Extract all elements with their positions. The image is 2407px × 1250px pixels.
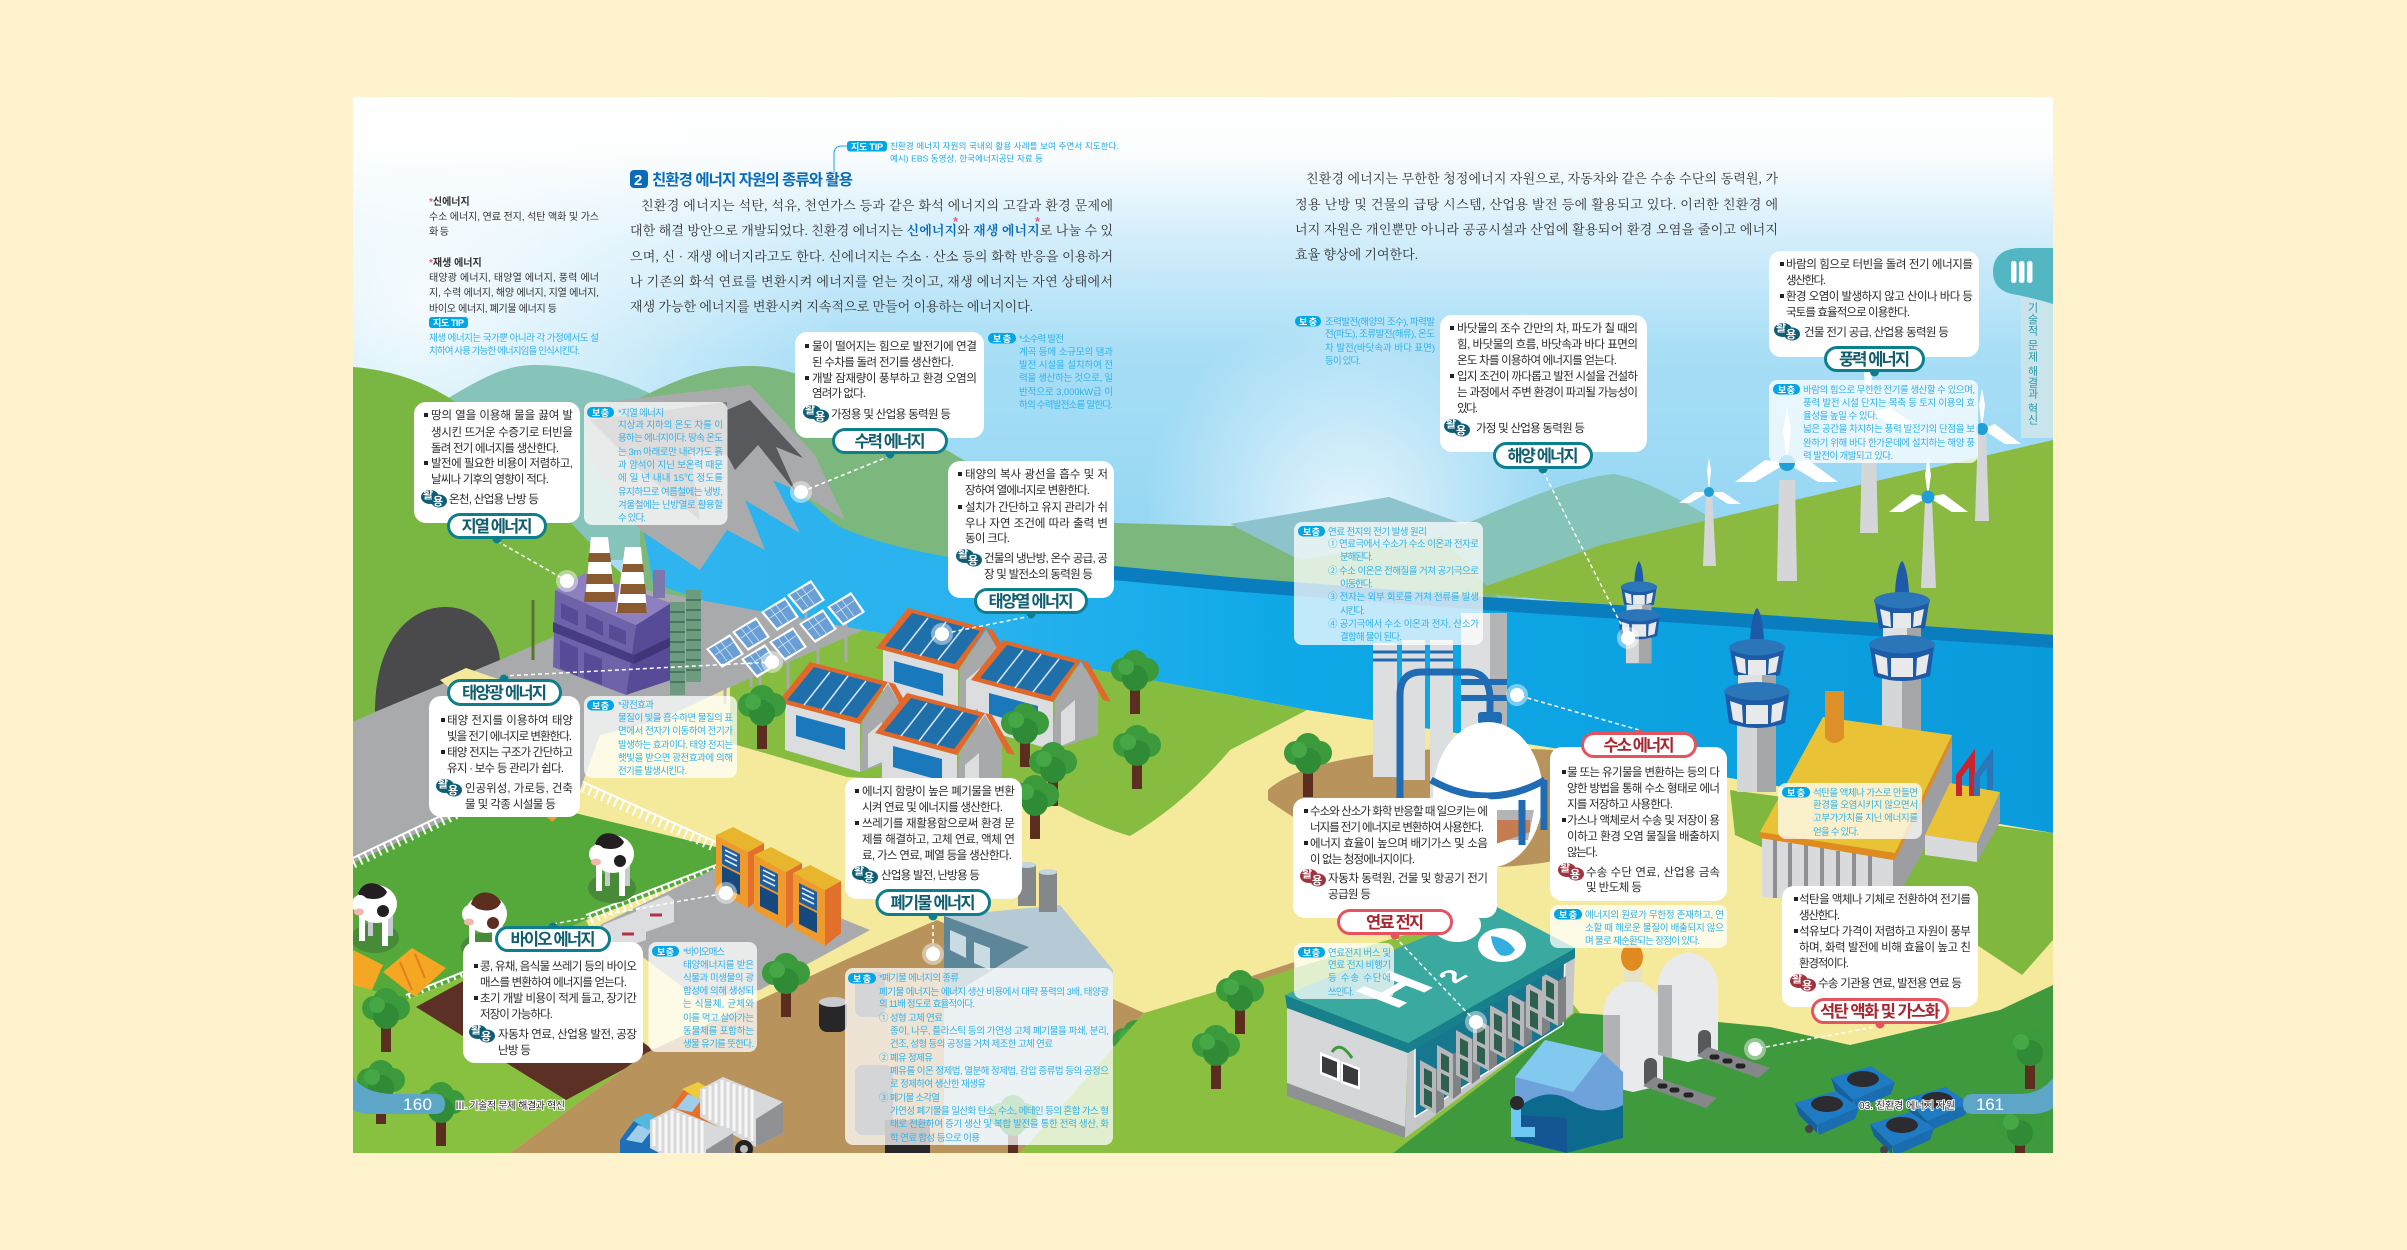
page number tab 160 <box>353 1077 445 1114</box>
sidebar glossary: 바이오 에너지, 폐기물 에너지 등 <box>429 303 557 315</box>
note: waste energy types: 태로 전환하여 증기 생산 및 복합 발전을 통한 전력 생산, 화 <box>890 1118 1109 1130</box>
note: photoelectric effect: 전기를 발생시킨다. <box>618 766 687 777</box>
panel: wind energy: 건물 전기 공급, 산업용 동력원 등 <box>1804 325 1949 339</box>
note: photoelectric effect <box>584 696 737 778</box>
panel: hydro energy: 물이 떨어지는 힘으로 발전기에 연결 <box>812 339 977 353</box>
grey pad and dirt yard <box>510 868 1144 1153</box>
right page light green wedge and dark green field <box>1020 748 2053 1153</box>
note: photoelectric effect: 햇빛을 받으면 광전효과에 의해 <box>618 752 733 764</box>
main paragraph right: 너지 자원은 개인뿐만 아니라 공공시설과 산업에 활용되어 환경 오염을 줄이고 에너지 <box>1295 222 1778 237</box>
label: hydro energy: 수력 에너지 <box>854 432 926 451</box>
label: fuel cell: 연료 전지 <box>1366 913 1424 932</box>
panel: hydrogen energy: 지를 저장하고 사용한다. <box>1567 797 1673 811</box>
footer right: 03. 친환경 에너지 자원 <box>1859 1099 1955 1112</box>
note: coal liquefaction: 석탄을 액체나 가스로 만들면 <box>1813 787 1918 799</box>
note: fuel cell vehicles: 등 수송 수단에 <box>1328 973 1391 984</box>
sidebar glossary: 화 등 <box>429 226 449 238</box>
panel: hydro energy: 된 수차를 돌려 전기를 생산한다. <box>812 356 954 369</box>
panel: hydrogen energy: 물 또는 유기물을 변환하는 등의 다 <box>1567 765 1720 779</box>
label: ocean energy: 해양 에너지 <box>1508 446 1578 466</box>
panel: hydrogen energy: 가스나 액체로서 수송 및 저장이 용 <box>1567 814 1720 827</box>
panel: hydrogen energy: 및 반도체 등 <box>1586 881 1642 894</box>
truck blue <box>620 1108 733 1153</box>
label: solar thermal energy: 태양열 에너지 <box>988 592 1074 611</box>
river <box>643 480 2053 833</box>
panel: ocean energy: 입지 조건이 까다롭고 발전 시설을 건설하 <box>1457 369 1638 383</box>
label: bio energy: 바이오 에너지 <box>510 930 596 949</box>
main paragraph left: 나 기존의 화석 연료를 변환시켜 에너지를 얻는 것이고, 재생 에너지는 자연 상태에서 <box>630 274 1113 289</box>
chapter tab: 기술적 문제 해결과 혁신 <box>2026 302 2038 425</box>
label: coal liquefaction and gasification <box>1812 1000 1948 1028</box>
panel: solar thermal energy: 장하여 열에너지로 변환한다. <box>965 483 1090 497</box>
label: hydro energy <box>834 430 946 458</box>
panel: photovoltaic energy: 활 <box>438 776 448 790</box>
fuel cell building: 2 <box>1431 966 1476 987</box>
illustrated landscape scene <box>351 97 2054 1189</box>
panel: waste energy: 쓰레기를 재활용함으로써 환경 문 <box>862 816 1015 830</box>
label: fuel cell <box>1338 910 1452 940</box>
panel: solar thermal energy: 장 및 발전소의 동력원 등 <box>984 567 1093 581</box>
hay bales <box>353 948 446 997</box>
panel: solar thermal energy: 동이 크다. <box>965 532 1010 545</box>
note: small hydro: *소수력 발전 <box>1019 333 1064 345</box>
sidebar glossary: 재생 에너지는 국가뿐 아니라 각 가정에서도 설 <box>429 332 599 344</box>
panel: bio energy <box>463 942 643 1063</box>
note: ocean energy types <box>1295 316 1435 367</box>
waste energy building <box>944 862 1113 1145</box>
panel: geothermal energy: 날씨나 기후의 영향이 적다. <box>431 473 549 486</box>
note: biomass: 태양에너지를 받은 <box>683 960 754 971</box>
label: hydrogen energy <box>1582 730 1696 756</box>
panel: ocean energy <box>1440 315 1647 452</box>
note: geothermal: 과 암석이 지닌 보온력 때문 <box>618 459 723 471</box>
note: waste energy types: *폐기물 에너지의 종류 <box>879 972 959 984</box>
fuel cell building <box>1285 907 1575 1138</box>
page number tab 161: 161 <box>1976 1095 2004 1114</box>
note: small hydro: 반적으로 3,000kW급 이 <box>1019 386 1113 398</box>
section heading: 2 <box>634 172 642 189</box>
panel: waste energy: 에너지 함량이 높은 폐기물을 변환 <box>862 785 1015 798</box>
note: waste energy types: 폐유를 이온 정제법, 열분해 정제법, 감압 증류법 등의 공정으 <box>890 1065 1109 1077</box>
note: fuel cell principle: 결합해 물이 된다. <box>1340 631 1402 643</box>
trees right page <box>1192 733 2054 1169</box>
sidebar glossary: 수소 에너지, 연료 전지, 석탄 액화 및 가스 <box>429 211 599 223</box>
note: waste energy types: ① 성형 고체 연료 <box>879 1013 943 1024</box>
panel: wind energy: 용 <box>1786 328 1796 341</box>
note: waste energy types: 의 11배 정도로 효율적이다. <box>879 998 975 1010</box>
label: photovoltaic energy: 태양광 에너지 <box>462 684 547 702</box>
fuel cell building: H <box>1339 964 1451 1015</box>
note: biomass: 동물체를 포함하는 <box>683 1025 754 1037</box>
panel: coal liquefaction and gasification: 환경적이다. <box>1799 956 1849 970</box>
panel: ocean energy: 온도 차를 이용하여 에너지를 얻는다. <box>1457 353 1617 367</box>
panel: photovoltaic energy: 태양 전지를 이용하여 태양 <box>447 713 573 727</box>
main paragraph right <box>1295 171 1778 262</box>
note: fuel cell vehicles: 보충 <box>1303 948 1320 958</box>
teaching tip top: 예시) EBS 동영상, 한국에너지공단 자료 등 <box>890 154 1043 164</box>
note: biomass: 는 식물체, 균체와 <box>683 998 754 1010</box>
panel: hydrogen energy: 이하고 환경 오염 물질을 배출하지 <box>1567 829 1720 843</box>
panel: fuel cell: 자동차 동력원, 건물 및 항공기 전기 <box>1328 871 1488 885</box>
note: photoelectric effect: 면에서 전자가 이동하여 전기가 <box>618 725 733 737</box>
label: coal liquefaction and gasification: 석탄 액화 및 가스화 <box>1820 1002 1940 1021</box>
note: geothermal <box>584 402 728 525</box>
panel: fuel cell: 용 <box>1312 874 1322 887</box>
label: ocean energy <box>1494 444 1592 474</box>
footer left: Ⅲ. 기술적 문제 해결과 혁신 <box>455 1099 565 1112</box>
note: geothermal: 보충 <box>592 408 609 418</box>
note: small hydro: 력을 생산하는 것으로, 일 <box>1019 372 1113 384</box>
panel: photovoltaic energy: 인공위성, 가로등, 건축 <box>465 782 573 795</box>
note: fuel cell vehicles: 쓰인다. <box>1328 987 1354 998</box>
sky <box>353 97 2053 717</box>
note: waste energy types: 로 정제하여 생산한 재생유 <box>890 1078 986 1090</box>
panel: geothermal energy: 생시킨 뜨거운 수증기로 터빈을 <box>431 426 573 439</box>
note: small hydro <box>988 333 1113 411</box>
note: geothermal: 지상과 지하의 온도 차를 이 <box>618 419 723 431</box>
note: geothermal: 용하는 에너지이다. 땅속 온도 <box>618 432 723 444</box>
panel: hydrogen energy: 양한 방법을 통해 수소 형태로 에너 <box>1567 782 1720 795</box>
panel: coal liquefaction and gasification: 용 <box>1802 979 1812 992</box>
panel: coal liquefaction and gasification <box>1782 886 1978 1007</box>
label: geothermal energy <box>448 514 546 544</box>
panel: waste energy: 시켜 연료 및 에너지를 생산한다. <box>862 801 1003 814</box>
panel: coal liquefaction and gasification: 생산한다. <box>1799 909 1840 922</box>
coal silos <box>1603 943 1770 1108</box>
main paragraph right: 친환경 에너지는 무한한 청정에너지 자원으로, 자동차와 같은 수송 수단의 동력원, 가 <box>1306 171 1778 186</box>
panel: fuel cell: 이 없는 청정에너지이다. <box>1310 853 1415 866</box>
panel: geothermal energy: 돌려 전기 에너지를 생산한다. <box>431 442 559 455</box>
note: fuel cell vehicles: 연료 전지 비행기 <box>1328 959 1391 971</box>
note: fuel cell principle: 보충 <box>1303 527 1320 537</box>
note: fuel cell principle: ② 수소 이온은 전해질을 거쳐 공기극으로 <box>1328 565 1479 577</box>
note: biomass: 식물과 미생물의 광 <box>683 972 754 984</box>
note: photoelectric effect: 발생하는 효과이다. 태양 전지는 <box>618 739 733 751</box>
panel: photovoltaic energy: 물 및 각종 시설물 등 <box>465 798 556 811</box>
note: small hydro: 하의 수력발전소를 말한다. <box>1019 399 1113 411</box>
note: fuel cell principle: 연료 전지의 전기 발생 원리 <box>1328 527 1427 538</box>
sidebar glossary: *재생 에너지 <box>429 256 482 269</box>
grey road <box>353 590 863 870</box>
note: waste energy types <box>845 968 1113 1145</box>
sidebar glossary: 지, 수력 에너지, 해양 에너지, 지열 에너지, <box>429 286 599 299</box>
cow field and fence <box>353 782 716 1000</box>
note: wind farm <box>1769 380 1978 463</box>
note: biomass: *바이오매스 <box>683 947 725 958</box>
note: fuel cell vehicles <box>1294 943 1394 999</box>
panel: fuel cell: 활 <box>1302 866 1312 880</box>
label: waste energy <box>877 890 990 920</box>
panel: solar thermal energy: 설치가 간단하고 유지 관리가 쉬 <box>965 500 1108 514</box>
main paragraph left: 친환경 에너지는 석탄, 석유, 천연가스 등과 같은 화석 에너지의 고갈과 환경 문제에 <box>641 198 1113 213</box>
label: solar thermal energy <box>976 590 1086 618</box>
panel: hydrogen energy: 용 <box>1570 868 1580 881</box>
note: waste energy types: 가연성 폐기물을 일산화 탄소, 수소, 메테인 등의 혼합 가스 형 <box>890 1105 1109 1117</box>
sidebar glossary <box>429 195 599 357</box>
note: biomass: 이를 먹고 살아가는 <box>683 1013 754 1024</box>
section heading: 친환경 에너지 자원의 종류와 활용 <box>652 171 853 189</box>
note: waste energy types: 종이, 나무, 플라스틱 등의 가연성 고체 폐기물을 파쇄, 분리, <box>890 1025 1109 1037</box>
panel: geothermal energy: 활 <box>423 487 433 501</box>
label: photovoltaic energy <box>448 674 560 704</box>
note: ocean energy types: 조력발전(해양의 조수), 파력발 <box>1325 316 1435 328</box>
geothermal factory <box>533 537 701 695</box>
panel: wind energy: 국토를 효율적으로 이용한다. <box>1786 306 1910 319</box>
panel: solar thermal energy: 활 <box>958 546 968 560</box>
panel: waste energy: 산업용 발전, 난방용 등 <box>881 869 980 882</box>
panel: ocean energy: 있다. <box>1457 402 1478 415</box>
note: small hydro: 계곡 등에 소규모의 댐과 <box>1019 346 1113 358</box>
coal liquefaction factory <box>1760 691 2000 905</box>
main paragraph left <box>630 198 1113 314</box>
panel: waste energy: 제를 해결하고, 고체 연료, 액체 연 <box>862 832 1015 846</box>
sand ground <box>353 680 2053 1153</box>
note: small hydro: 발전 시설을 설치하여 전 <box>1019 359 1113 371</box>
main paragraph left: * <box>1035 214 1041 229</box>
note: waste energy types: ③ 폐기물 소각열 <box>879 1092 940 1104</box>
panel: hydro energy: 개발 잠재량이 풍부하고 환경 오염의 <box>812 371 977 385</box>
panel: hydrogen energy: 활 <box>1560 860 1570 874</box>
panel: waste energy: 용 <box>864 871 874 884</box>
note: photoelectric effect: *광전효과 <box>618 699 654 711</box>
panel: photovoltaic energy <box>429 696 580 817</box>
note: coal liquefaction: 보충 <box>1787 788 1805 798</box>
left green hill <box>353 367 650 722</box>
teaching tip top <box>834 141 1119 172</box>
note: waste energy types: 학 연료 합성 등으로 이용 <box>890 1133 980 1144</box>
note: geothermal: 에 일 년 내내 15℃ 정도를 <box>618 473 723 484</box>
small storage units <box>603 895 674 944</box>
note: fuel cell principle <box>1294 522 1483 645</box>
panel: bio energy: 난방 등 <box>498 1044 531 1057</box>
panel: ocean energy: 활 <box>1446 416 1456 430</box>
note: ocean energy types: 차 발전(바닷속과 바다 표면) <box>1325 342 1435 354</box>
panel: wind energy: 활 <box>1776 320 1786 334</box>
note: wind farm: 풍력 발전 시설 단지는 목축 등 토지 이용의 효 <box>1803 397 1975 409</box>
note: waste energy types: 보충 <box>853 974 871 984</box>
panel: wind energy: 생산한다. <box>1786 274 1826 287</box>
panel: bio energy: 자동차 연료, 산업용 발전, 공장 <box>498 1028 637 1041</box>
note: fuel cell principle: ③ 전자는 외부 회로를 거쳐 전류를 발생 <box>1328 591 1479 603</box>
note: wind farm: 넓은 공간을 차지하는 풍력 발전기의 단점을 보 <box>1803 423 1975 435</box>
hydrogen plant <box>1373 613 1545 868</box>
panel: fuel cell: 수소와 산소가 화학 반응할 때 일으키는 에 <box>1310 804 1488 818</box>
offshore towers <box>1618 561 1935 792</box>
panel: coal liquefaction and gasification: 활 <box>1792 971 1802 985</box>
coal carts <box>1795 1066 1969 1156</box>
note: fuel cell vehicles: 연료전지 버스 및 <box>1328 947 1391 959</box>
sidebar glossary: 지도 TIP <box>433 318 464 328</box>
panel: solar thermal energy: 용 <box>968 554 978 567</box>
note: hydrogen <box>1550 905 1727 948</box>
note: geothermal: 유지하므로 여름철에는 냉방, <box>618 486 723 498</box>
mountains <box>400 365 2053 650</box>
note: fuel cell principle: ④ 공기극에서 수소 이온과 전자, 산소가 <box>1328 619 1479 630</box>
panel: wind energy: 환경 오염이 발생하지 않고 산이나 바다 등 <box>1786 289 1973 303</box>
note: biomass: 생물 유기를 뜻한다. <box>683 1039 754 1050</box>
note: wind farm: 바람의 힘으로 무한한 전기를 생산할 수 있으며, <box>1803 384 1975 396</box>
note: hydrogen: 소할 때 해로운 물질이 배출되지 않으 <box>1585 922 1724 934</box>
note: hydrogen: 며 물로 재순환되는 장점이 있다. <box>1585 935 1700 947</box>
panel: hydrogen energy <box>1550 747 1727 901</box>
panel: ocean energy: 용 <box>1456 424 1466 437</box>
panel: photovoltaic energy: 유지 · 보수 등 관리가 쉽다. <box>447 762 564 775</box>
label: hydrogen energy: 수소 에너지 <box>1604 736 1674 755</box>
truck orange <box>670 1077 783 1158</box>
panel: geothermal energy: 발전에 필요한 비용이 저렴하고, <box>431 456 573 470</box>
note: geothermal: 수 있다. <box>618 512 646 524</box>
green lobe under river <box>730 630 1307 836</box>
panel: geothermal energy: 온천, 산업용 난방 등 <box>449 492 539 506</box>
main paragraph right: 효율 향상에 기여한다. <box>1295 247 1418 262</box>
chapter tab <box>1993 248 2053 438</box>
cows <box>351 833 636 963</box>
dam <box>583 385 845 570</box>
note: coal liquefaction: 고부가가치를 지닌 에너지를 <box>1813 812 1918 824</box>
panel: fuel cell: 에너지 효율이 높으며 배기가스 및 소음 <box>1310 837 1488 850</box>
note: ocean energy types: 전(파도), 조류발전(해류), 온도 <box>1325 328 1435 340</box>
panel: coal liquefaction and gasification: 하며, 화력 발전에 비해 효율이 높고 친 <box>1799 940 1971 954</box>
panel: solar thermal energy: 태양의 복사 광선을 흡수 및 저 <box>965 467 1108 481</box>
panel: hydro energy: 가정용 및 산업용 동력원 등 <box>831 407 951 421</box>
note: geothermal: 겨울철에는 난방열로 활용할 <box>618 499 723 511</box>
panel: bio energy: 매스를 변환하여 에너지를 얻는다. <box>480 975 627 989</box>
page number tab 161 <box>1963 1078 2053 1114</box>
panel: fuel cell <box>1293 798 1497 918</box>
teaching tip top: 지도 TIP <box>851 142 883 152</box>
panel: ocean energy: 힘, 바닷물의 흐름, 바닷속과 바다 표면의 <box>1457 338 1638 351</box>
panel: hydrogen energy: 않는다. <box>1567 846 1598 859</box>
panel: geothermal energy: 용 <box>433 495 443 508</box>
panel: photovoltaic energy: 용 <box>448 784 458 797</box>
panel: wind energy <box>1769 251 1979 357</box>
panel: hydro energy <box>795 332 984 438</box>
panel: wind energy: 바람의 힘으로 터빈을 돌려 전기 에너지를 <box>1786 258 1973 271</box>
panel: ocean energy: 바닷물의 조수 간만의 차, 파도가 칠 때의 <box>1457 322 1638 335</box>
tunnel <box>375 607 500 712</box>
note: small hydro: 보충 <box>993 334 1011 344</box>
panel: bio energy: 초기 개발 비용이 적게 들고, 장기간 <box>480 992 637 1005</box>
panel: solar thermal energy: 건물의 냉난방, 온수 공급, 공 <box>984 552 1108 565</box>
main paragraph left: * <box>953 214 959 229</box>
lower left meadow and farm plot <box>353 920 656 1153</box>
panel: hydro energy: 활 <box>805 402 815 416</box>
panel: photovoltaic energy: 태양 전지는 구조가 간단하고 <box>447 745 573 759</box>
main paragraph right: 정용 난방 및 건물의 급탕 시스템, 산업용 발전 등에 활용되고 있다. 이러한 친환경 에 <box>1295 197 1778 212</box>
note: fuel cell principle: 시킨다. <box>1340 606 1365 617</box>
note: geothermal: 는 3m 아래로만 내려가도 흙 <box>618 446 723 458</box>
note: biomass: 보충 <box>657 947 674 957</box>
note: geothermal: *지열 에너지 <box>618 408 664 419</box>
trees left page <box>357 650 1161 1159</box>
tire stacks <box>819 972 930 1153</box>
panel: coal liquefaction and gasification: 수송 기관용 연료, 발전용 연료 등 <box>1818 977 1962 990</box>
panel: geothermal energy: 땅의 열을 이용해 물을 끓여 발 <box>431 409 573 422</box>
panel: ocean energy: 가정 및 산업용 동력원 등 <box>1476 421 1585 435</box>
panel: photovoltaic energy: 빛을 전기 에너지로 변환한다. <box>447 730 572 743</box>
note: fuel cell principle: 분해된다. <box>1340 551 1373 563</box>
panel: waste energy <box>845 778 1022 899</box>
main paragraph left: 재생 가능한 에너지를 변환시켜 지속적으로 만들어 이용하는 에너지이다. <box>630 299 1033 314</box>
note: fuel cell principle: 이동한다. <box>1340 579 1373 590</box>
panel: solar thermal energy <box>948 461 1114 598</box>
note: wind farm: 완하기 위해 바다 한가운데에 설치하는 해양 풍 <box>1803 437 1975 449</box>
label: waste energy: 폐기물 에너지 <box>890 894 976 912</box>
main paragraph left: 대한 해결 방안으로 개발되었다. 친환경 에너지는 신에너지와 재생 에너지로 나눌 수 있 <box>630 223 1113 238</box>
panel: coal liquefaction and gasification: 석탄을 액체나 기체로 전환하여 전기를 <box>1799 892 1971 906</box>
sidebar glossary: 태양광 에너지, 태양열 에너지, 풍력 에너 <box>429 272 599 284</box>
orange battery cabinets <box>716 827 841 946</box>
panel: ocean energy: 는 과정에서 주변 환경이 파괴될 가능성이 <box>1457 385 1638 399</box>
label: wind energy: 풍력 에너지 <box>1839 350 1910 369</box>
note: wind farm: 율성을 높일 수 있다. <box>1803 410 1878 422</box>
sidebar glossary: 치하여 사용 가능한 에너지임을 인식시킨다. <box>429 345 580 357</box>
panel: waste energy: 료, 가스 연료, 폐열 등을 생산한다. <box>862 849 1012 862</box>
note: coal liquefaction: 환경을 오염시키지 않으면서 <box>1813 799 1918 811</box>
label: bio energy <box>496 922 610 950</box>
note: wind farm: 력 발전이 개발되고 있다. <box>1803 450 1893 462</box>
panel: bio energy: 활 <box>471 1022 481 1036</box>
main paragraph left: 으며, 신 · 재생 에너지라고도 한다. 신에너지는 수소 · 산소 등의 화학 반응을 이용하거 <box>630 249 1113 264</box>
note: fuel cell principle: ① 연료극에서 수소가 수소 이온과 전자로 <box>1328 539 1479 550</box>
panel: waste energy: 활 <box>854 863 864 877</box>
note: ocean energy types: 등이 있다. <box>1325 355 1361 367</box>
teaching tip top: 친환경 에너지 자원의 국내외 활용 사례를 보여 주면서 지도한다. <box>890 141 1119 151</box>
panel: bio energy: 저장이 가능하다. <box>480 1007 553 1021</box>
note: coal liquefaction: 얻을 수 있다. <box>1813 826 1859 838</box>
note: waste energy types: ② 폐유 정제유 <box>879 1052 933 1064</box>
note: coal liquefaction <box>1778 783 1922 839</box>
panel: fuel cell: 너지를 전기 에너지로 변환하여 사용한다. <box>1310 820 1484 834</box>
note: waste energy types: 건조, 성형 등의 공정을 거쳐 제조한 고체 연료 <box>890 1038 1053 1050</box>
note: photoelectric effect: 보충 <box>592 701 609 711</box>
panel: bio energy: 용 <box>481 1030 491 1043</box>
note: hydrogen: 에너지의 원료가 무한정 존재하고, 연 <box>1585 909 1724 921</box>
note: wind farm: 보충 <box>1778 385 1795 395</box>
panel: geothermal energy <box>414 402 580 523</box>
panel: hydro energy: 용 <box>815 410 825 423</box>
note: waste energy types: 폐기물 에너지는 에너지 생산 비용에서 대략 풍력의 3배, 태양광 <box>879 986 1109 998</box>
note: hydrogen: 보충 <box>1559 910 1577 920</box>
houses with rooftop solar <box>782 608 1111 778</box>
panel: fuel cell: 공급원 등 <box>1328 887 1371 901</box>
note: photoelectric effect: 물질이 빛을 흡수하면 물질의 표 <box>618 712 733 724</box>
note: biomass <box>648 942 757 1052</box>
panel: coal liquefaction and gasification: 석유보다 가격이 저렴하고 자원이 풍부 <box>1799 924 1971 938</box>
note: ocean energy types: 보충 <box>1299 317 1317 327</box>
label: wind energy <box>1826 348 1924 376</box>
blue water tank <box>1510 1040 1623 1153</box>
note: biomass: 합성에 의해 생성되 <box>683 985 754 997</box>
solar panels <box>706 580 865 714</box>
panel: bio energy: 콩, 유채, 음식물 쓰레기 등의 바이오 <box>480 960 637 973</box>
panel: solar thermal energy: 우나 자연 조건에 따라 출력 변 <box>965 517 1108 530</box>
wind turbines <box>1679 372 2021 588</box>
label: geothermal energy: 지열 에너지 <box>462 517 532 536</box>
panel: hydrogen energy: 수송 수단 연료, 산업용 금속 <box>1586 866 1720 879</box>
panel: hydro energy: 염려가 없다. <box>812 387 866 400</box>
sidebar glossary: *신에너지 <box>429 195 470 208</box>
callout connector lines and hotspots <box>497 456 1880 1060</box>
page number tab 160: 160 <box>403 1095 432 1114</box>
